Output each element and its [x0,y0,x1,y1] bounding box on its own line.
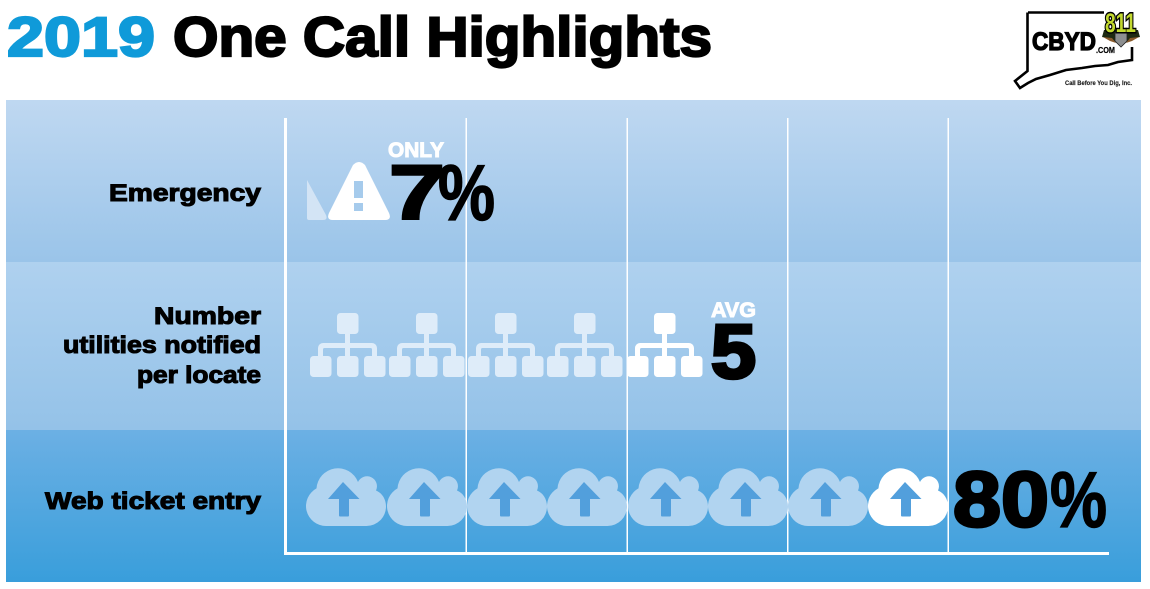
chart grid and axes [284,118,1109,555]
label: Emergency: Emergency [109,180,261,207]
icons: cloud row [306,468,948,526]
logo: CBYD 811: Call Before You Dig, Inc. [1065,80,1132,87]
logo: CBYD 811: .COM [1096,46,1115,55]
title: 2019 [7,5,155,68]
label: Number utilities notified per locate [63,303,262,389]
icons: network row [310,313,702,377]
logo: CBYD 811 [1015,8,1140,88]
stat: 80%: 80 [953,455,1049,543]
label: Number utilities notified per locate: Number [154,303,262,330]
label: Number utilities notified per locate: utilities notified [63,332,261,359]
stat: 80% [953,455,1107,544]
logo: CBYD 811: 811 [1105,8,1136,38]
label: Number utilities notified per locate: per locate [137,362,261,389]
stat: 80%: % [1050,455,1107,544]
label: Web ticket entry: Web ticket entry [45,488,261,515]
stat: ONLY 7%: 7 [389,150,445,236]
logo: CBYD 811: CBYD [1032,28,1096,56]
stat: ONLY 7%: ONLY [388,138,444,162]
icon: partial warning triangle [307,180,327,220]
stat: ONLY 7%: % [438,148,495,237]
title: One Call Highlights [173,5,712,68]
stat: AVG 5: 5 [711,310,756,395]
icon: warning triangle [328,162,390,220]
stat: ONLY 7% [388,138,495,237]
stat: AVG 5: AVG [711,298,756,322]
